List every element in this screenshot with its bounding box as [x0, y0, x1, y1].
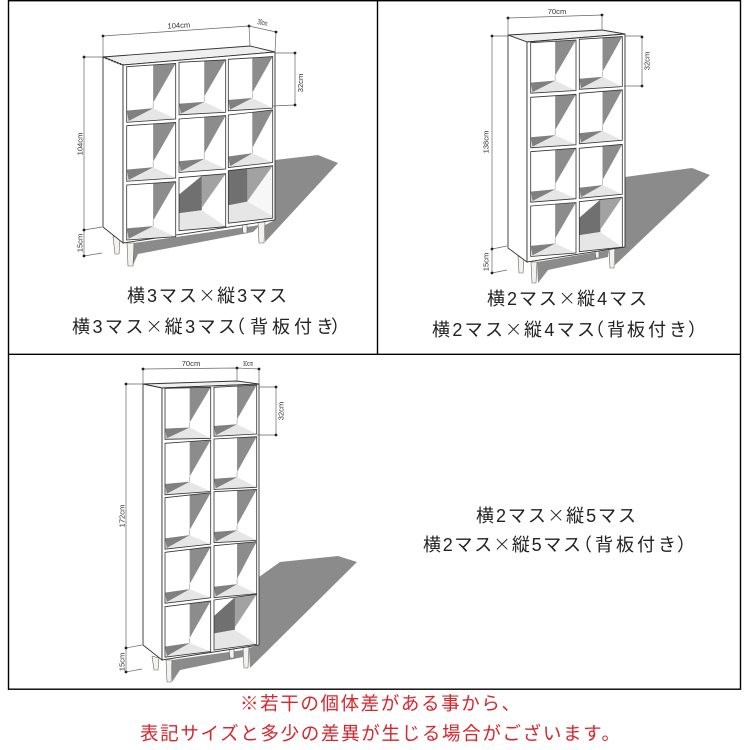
caption: 2x5 shelf: （背板付き）	[574, 535, 695, 555]
panel: 3x3 shelf	[72, 17, 349, 342]
caption: 2x4 shelf	[432, 282, 706, 344]
footnote	[140, 693, 620, 744]
dimension lines: 3x3 shelf	[76, 17, 305, 257]
caption: 3x3 shelf	[72, 280, 349, 342]
caption: 2x4 shelf: 横2マス	[432, 320, 503, 340]
caption: 3x3 shelf: 横3マス	[127, 286, 197, 306]
dimension lines: 2x4 shelf: 32cm	[642, 52, 652, 70]
caption: 2x4 shelf: 縦4マス	[524, 320, 595, 340]
dimension lines: 3x3 shelf: 32cm	[296, 74, 305, 92]
illustration: 3x3 shelf	[103, 46, 338, 266]
dimension lines: 2x5 shelf: 70cm	[182, 359, 200, 368]
caption: 2x5 shelf: 横2マス	[423, 535, 492, 555]
dimension lines: 3x3 shelf: 104cm	[76, 133, 84, 155]
illustration: 2x5 shelf	[143, 381, 357, 682]
footnote: 表記サイズと多少の差異が生じる場合がございます。	[140, 723, 620, 744]
dimension lines: 2x5 shelf: 32cm	[276, 402, 286, 420]
caption: 2x5 shelf: ×	[494, 528, 510, 560]
dimension lines: 2x4 shelf	[482, 7, 652, 274]
panel: 2x4 shelf	[432, 7, 710, 344]
dimension lines: 2x5 shelf: 15cm	[118, 653, 126, 671]
dimension lines: 3x3 shelf: 104cm	[167, 20, 190, 31]
caption: 2x4 shelf: 横2マス	[487, 289, 557, 309]
caption: 2x5 shelf	[423, 500, 695, 560]
caption: 2x4 shelf: （背板付き）	[586, 320, 706, 340]
dimension lines: 2x4 shelf: 70cm	[548, 7, 566, 16]
caption: 2x5 shelf: ×	[548, 500, 564, 530]
footnote: ※若干の個体差がある事から、	[240, 693, 520, 714]
caption: 3x3 shelf: ×	[199, 280, 215, 310]
panel: 2x5 shelf	[118, 359, 695, 682]
dimension lines: 2x5 shelf: 172cm	[118, 505, 126, 527]
caption: 3x3 shelf: 横3マス	[72, 317, 143, 337]
caption: 3x3 shelf: 縦3マス	[165, 317, 236, 337]
dimension lines: 3x3 shelf: 30cm	[257, 17, 268, 28]
caption: 2x5 shelf: 縦5マス	[566, 506, 636, 526]
illustration: 2x4 shelf	[508, 30, 710, 283]
caption: 2x4 shelf: ×	[505, 314, 522, 344]
caption: 2x5 shelf: 縦5マス	[512, 535, 581, 555]
caption: 2x5 shelf: 横2マス	[476, 506, 546, 526]
caption: 3x3 shelf: （背板付き）	[227, 317, 349, 337]
caption: 2x4 shelf: 縦4マス	[577, 289, 647, 309]
dimension lines: 3x3 shelf: 15cm	[76, 234, 84, 252]
caption: 3x3 shelf: 縦3マス	[217, 286, 287, 306]
caption: 3x3 shelf: ×	[146, 310, 162, 342]
dimension lines: 2x5 shelf: 30cm	[243, 359, 253, 368]
dimension lines: 2x4 shelf: 138cm	[482, 131, 490, 153]
caption: 2x4 shelf: ×	[559, 282, 575, 314]
dimension lines: 2x4 shelf: 15cm	[482, 253, 490, 271]
dimension lines: 2x5 shelf	[118, 359, 286, 673]
